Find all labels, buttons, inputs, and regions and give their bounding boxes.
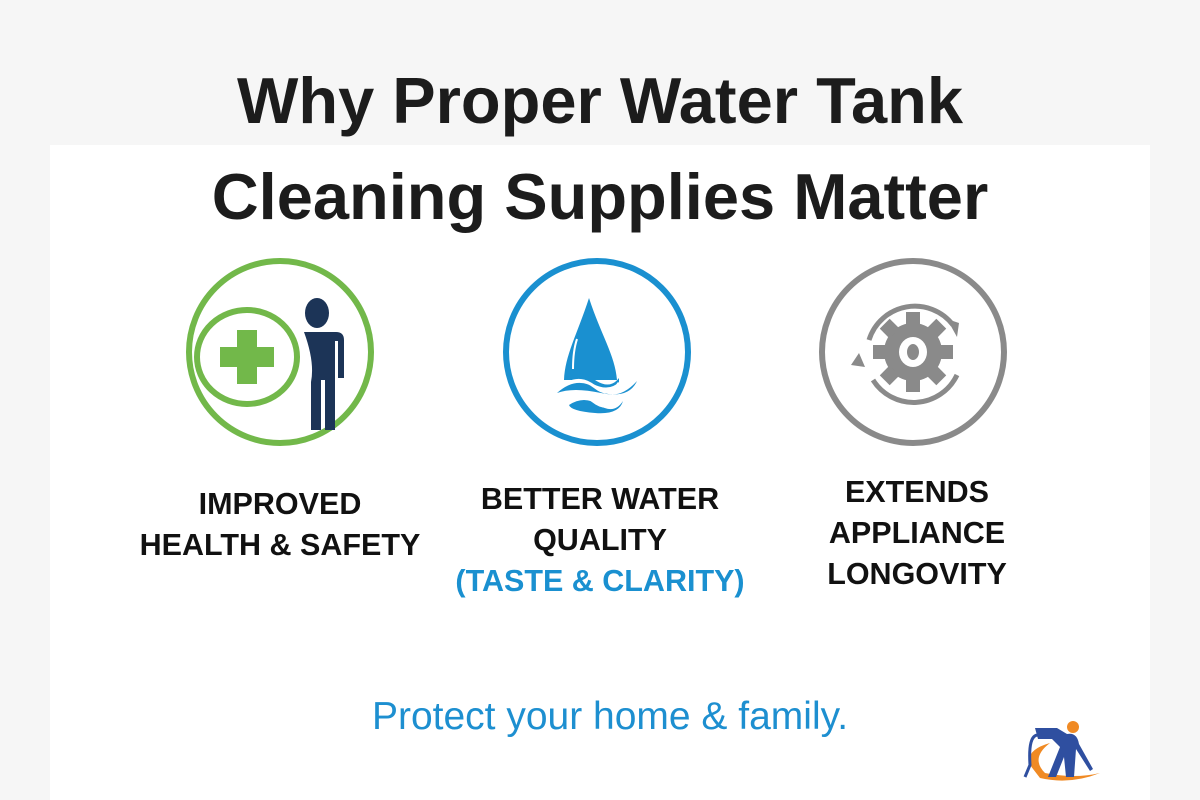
icon: water drop [503,258,691,446]
title: Cleaning Supplies Matter [212,160,988,233]
icon: health [186,258,374,446]
label: health: IMPROVED [199,487,361,521]
footer tagline: Protect your home & family. [372,695,848,738]
logo [1024,721,1100,781]
label: water quality: (TASTE & CLARITY) [455,564,745,598]
label: appliance: LONGOVITY [827,557,1007,591]
title: Why Proper Water Tank [237,64,963,137]
label: appliance: APPLIANCE [829,516,1005,550]
label: water quality: QUALITY [533,523,667,557]
label: appliance: EXTENDS [845,475,989,509]
label: health [140,487,420,562]
label: appliance [827,475,1007,591]
label: health: HEALTH & SAFETY [140,528,420,562]
label: water quality [455,482,745,598]
title [212,64,988,233]
icon: gear [819,258,1007,446]
label: water quality: BETTER WATER [481,482,719,516]
